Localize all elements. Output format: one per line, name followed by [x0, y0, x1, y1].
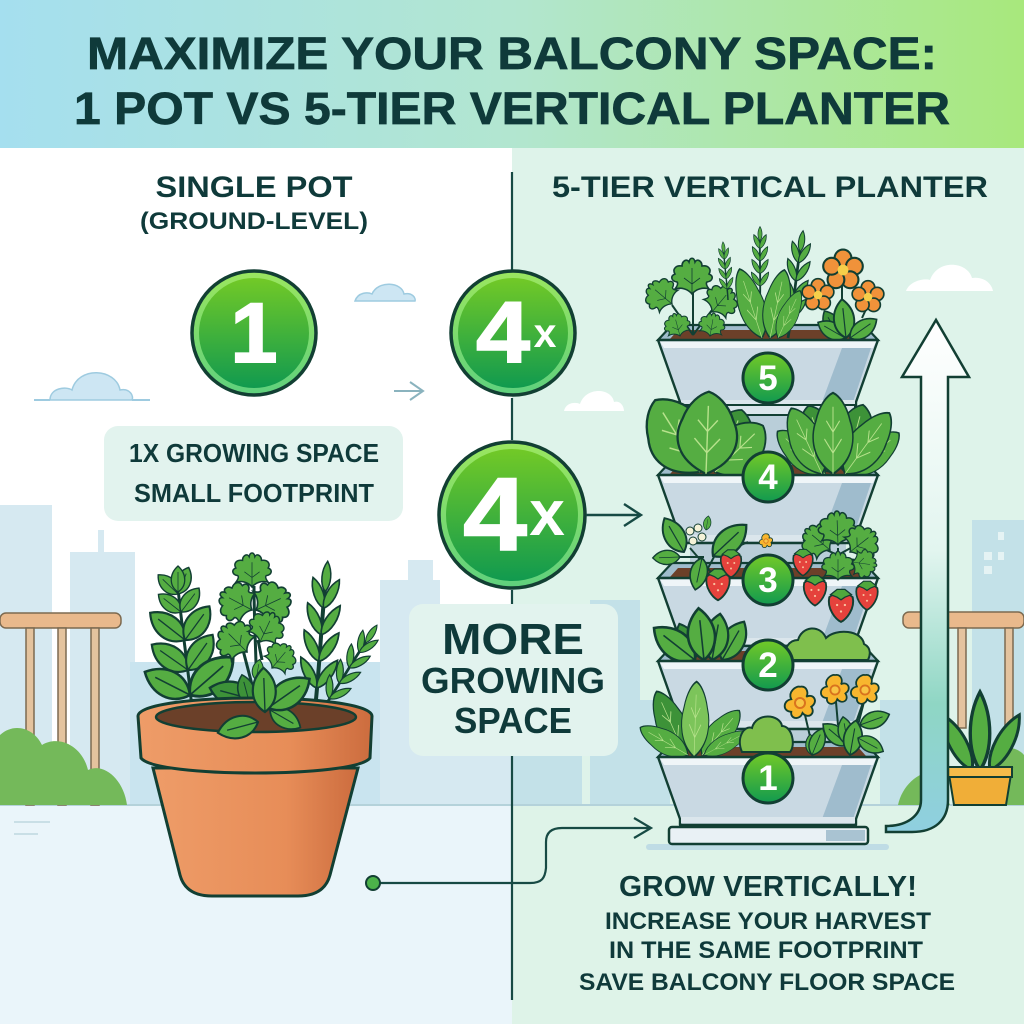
header band: [0, 0, 1024, 148]
badge 4: 4: [758, 458, 778, 497]
back column: [690, 400, 846, 830]
herb: oregano sprig: [139, 565, 243, 720]
windows: [984, 532, 1004, 574]
icon: terracotta pot: [138, 698, 372, 896]
plant: basil in front of soil: [215, 667, 317, 743]
planter: five-tier tower: [629, 227, 908, 850]
tier 5: [638, 227, 884, 415]
tier 1 plants: greens and yellow flowers: [635, 675, 892, 765]
text: grow vertically: INCREASE YOUR HARVEST: [605, 908, 931, 935]
skyline: left: [0, 505, 512, 805]
badge: 4x upper: [451, 271, 575, 395]
clouds: right: [564, 265, 993, 411]
callout: 1x growing space: SMALL FOOTPRINT: [134, 478, 374, 508]
badge 1: [743, 753, 793, 803]
connector: pot to planter: [366, 818, 651, 890]
tier 2: [646, 607, 878, 729]
shrub: right: [898, 772, 950, 805]
callout: more growing space: [409, 604, 618, 756]
badge 3: 3: [758, 561, 778, 600]
growth arrow: [886, 320, 969, 832]
badge: 4x upper: x: [534, 310, 557, 356]
title: [74, 28, 950, 134]
text: grow vertically: [579, 871, 955, 996]
heading: single pot: (GROUND-LEVEL): [140, 208, 368, 235]
heading: single pot: SINGLE POT: [156, 171, 352, 204]
badge: 4x upper: 4: [476, 284, 530, 381]
text: grow vertically: SAVE BALCONY FLOOR SPACE: [579, 969, 955, 996]
badge 3: [743, 555, 793, 605]
tier 3 plants: strawberries: [652, 510, 887, 622]
badge 4: [743, 452, 793, 502]
herb: rosemary sprigs: [291, 559, 390, 724]
floor: right: [512, 805, 1024, 1024]
floor: left: [0, 805, 512, 1024]
tier 4 plants: spinach and chard: [629, 384, 908, 489]
title: 1 POT VS 5-TIER VERTICAL PLANTER: [74, 83, 950, 134]
badge 1: 1: [758, 759, 778, 798]
callout: more growing space: GROWING: [421, 660, 605, 701]
background: right panel: [512, 148, 1024, 1024]
badge: 4x lower: x: [529, 477, 565, 549]
small potted plant: [935, 692, 1024, 805]
shrubs: left: [0, 728, 127, 805]
railing: right: [903, 612, 1024, 728]
badge 2: 2: [758, 646, 778, 685]
badge: 4x lower: 4: [463, 457, 527, 573]
arrow: to planter: [586, 504, 641, 526]
text: grow vertically: IN THE SAME FOOTPRINT: [609, 937, 923, 964]
title: MAXIMIZE YOUR BALCONY SPACE:: [87, 28, 937, 79]
tier 3: [652, 510, 887, 646]
plant: herbs in single pot: [139, 553, 390, 724]
tier 5 plants: parsley, herbs, flowers: [638, 227, 884, 345]
callout: more growing space: SPACE: [454, 700, 572, 741]
callout: 1x growing space: [104, 426, 403, 521]
heading: vertical planter: 5-TIER VERTICAL PLANTER: [552, 171, 988, 204]
callout: 1x growing space: 1X GROWING SPACE: [129, 438, 379, 468]
badge 5: 5: [758, 359, 778, 398]
tier 2 plants: leaves and lettuce: [646, 607, 870, 671]
badge: 4x lower: [439, 442, 585, 588]
small arrow: [394, 382, 423, 400]
divider: [511, 172, 513, 1000]
skyline: behind pot: [130, 662, 380, 805]
heading: single pot: [140, 171, 368, 235]
badge 2: [743, 640, 793, 690]
callout: more growing space: MORE: [442, 615, 584, 664]
badge: 1: 1: [231, 286, 277, 380]
tier 1: [635, 675, 892, 825]
clouds: left: [50, 284, 415, 400]
base tray: [669, 827, 868, 844]
tier 4: [629, 384, 908, 543]
railing: left: [0, 613, 121, 805]
badge: 1: [192, 271, 316, 395]
herb: parsley: [207, 553, 303, 722]
tray shadow: [646, 844, 889, 850]
skyline: right: [512, 520, 1024, 810]
background: left panel: [0, 148, 512, 1024]
text: grow vertically: GROW VERTICALLY!: [619, 871, 917, 903]
badge 5: [743, 353, 793, 403]
